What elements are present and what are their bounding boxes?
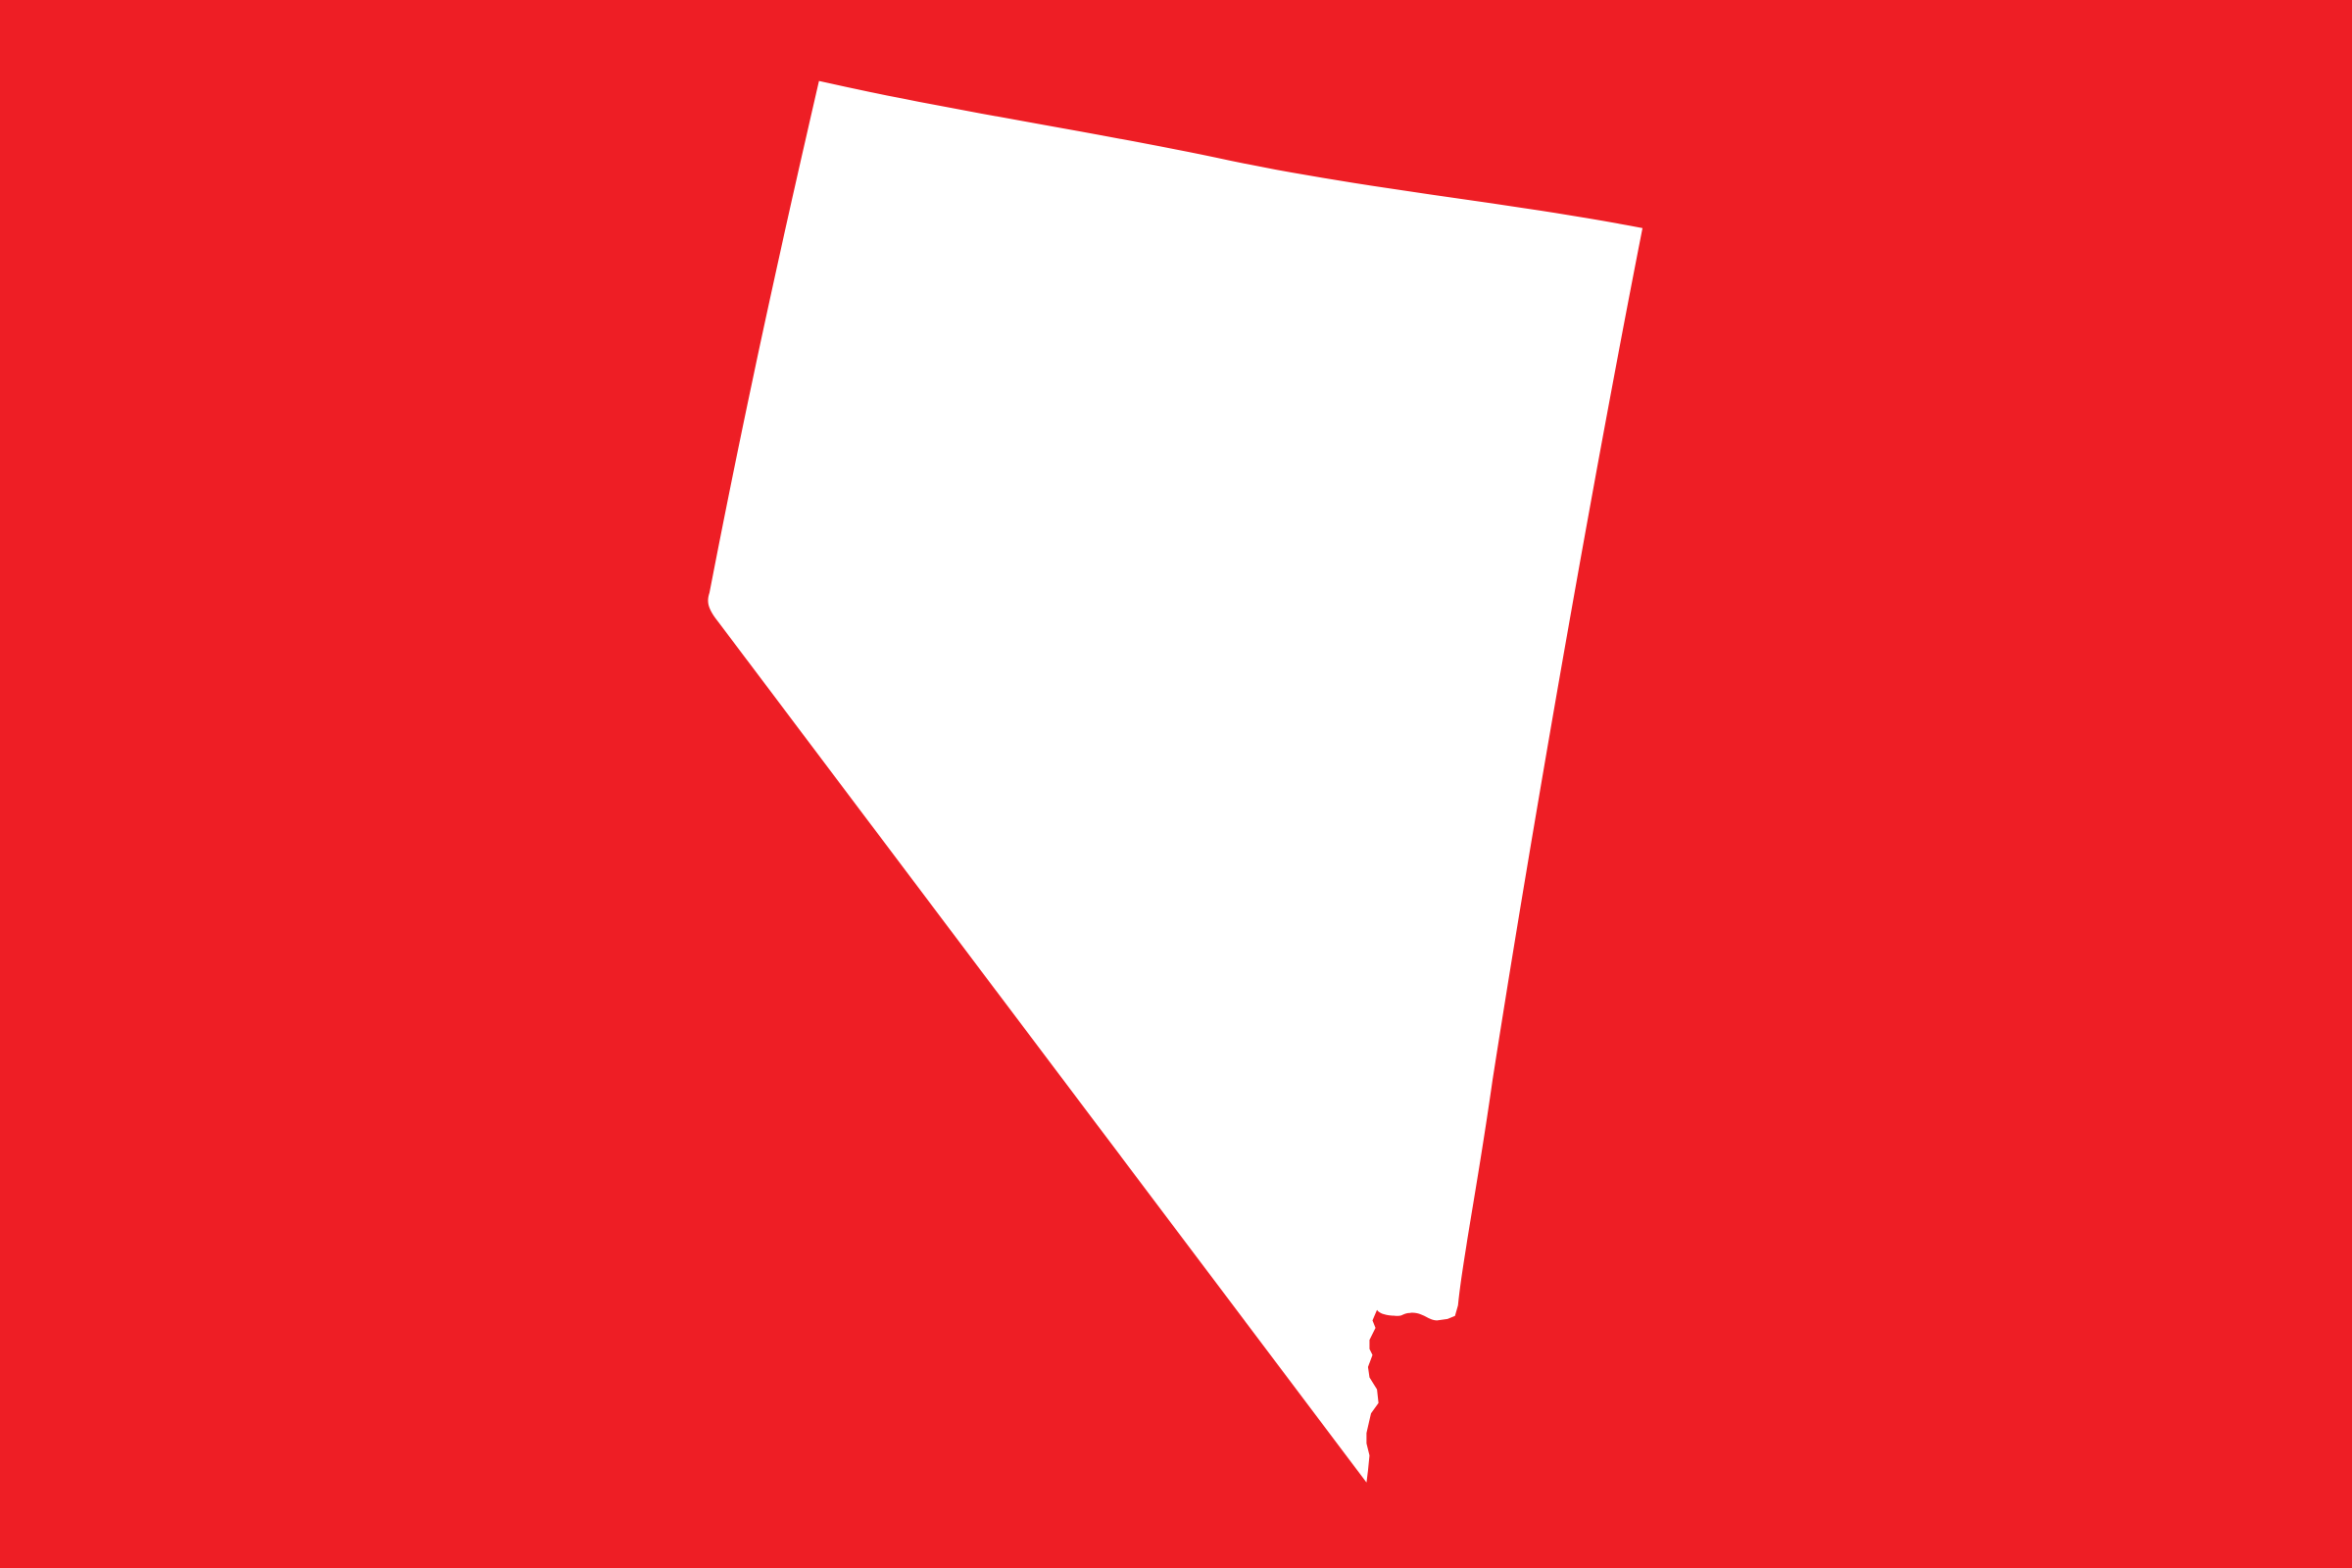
state shape: Nevada — [709, 81, 1642, 1483]
